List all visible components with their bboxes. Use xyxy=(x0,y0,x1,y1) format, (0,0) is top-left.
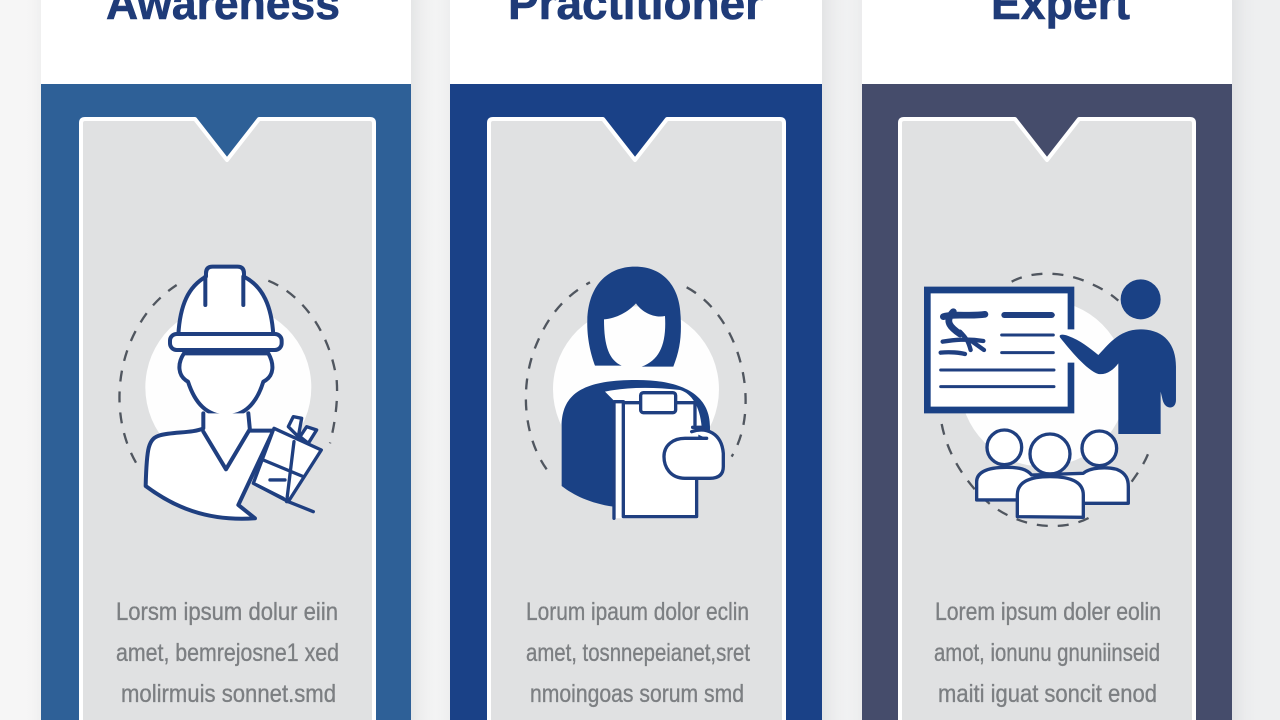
body text: expert: amot, ionunu gnuniinseid xyxy=(934,639,1160,667)
body text: practitioner: amet, tosnnepeianet,sret xyxy=(526,639,750,667)
panel: practitioner xyxy=(450,0,822,720)
panel: awareness xyxy=(41,0,411,720)
body text: awareness: Lorsm ipsum dolur eiin xyxy=(116,598,338,626)
inner card: practitioner xyxy=(489,119,784,720)
inner card: awareness xyxy=(81,119,374,720)
body text: awareness: amet, bemrejosne1 xed xyxy=(116,639,339,667)
body text: practitioner: nmoingoas sorum smd xyxy=(530,680,744,708)
body text: practitioner xyxy=(526,598,750,708)
body text: practitioner: Lorum ipaum dolor eclin xyxy=(526,598,749,626)
icon: trainer presenting to group xyxy=(927,274,1176,526)
icon: construction worker with plans xyxy=(119,267,337,519)
icon: woman with clipboard xyxy=(526,267,746,518)
panel: expert xyxy=(862,0,1232,720)
inner card: expert xyxy=(900,119,1194,720)
body text: expert xyxy=(934,598,1161,708)
body text: expert: Lorem ipsum doler eolin xyxy=(935,598,1161,626)
body text: awareness: molirmuis sonnet.smd xyxy=(121,680,336,708)
body text: expert: maiti iguat soncit enod xyxy=(938,680,1157,708)
body text: awareness xyxy=(116,598,339,708)
